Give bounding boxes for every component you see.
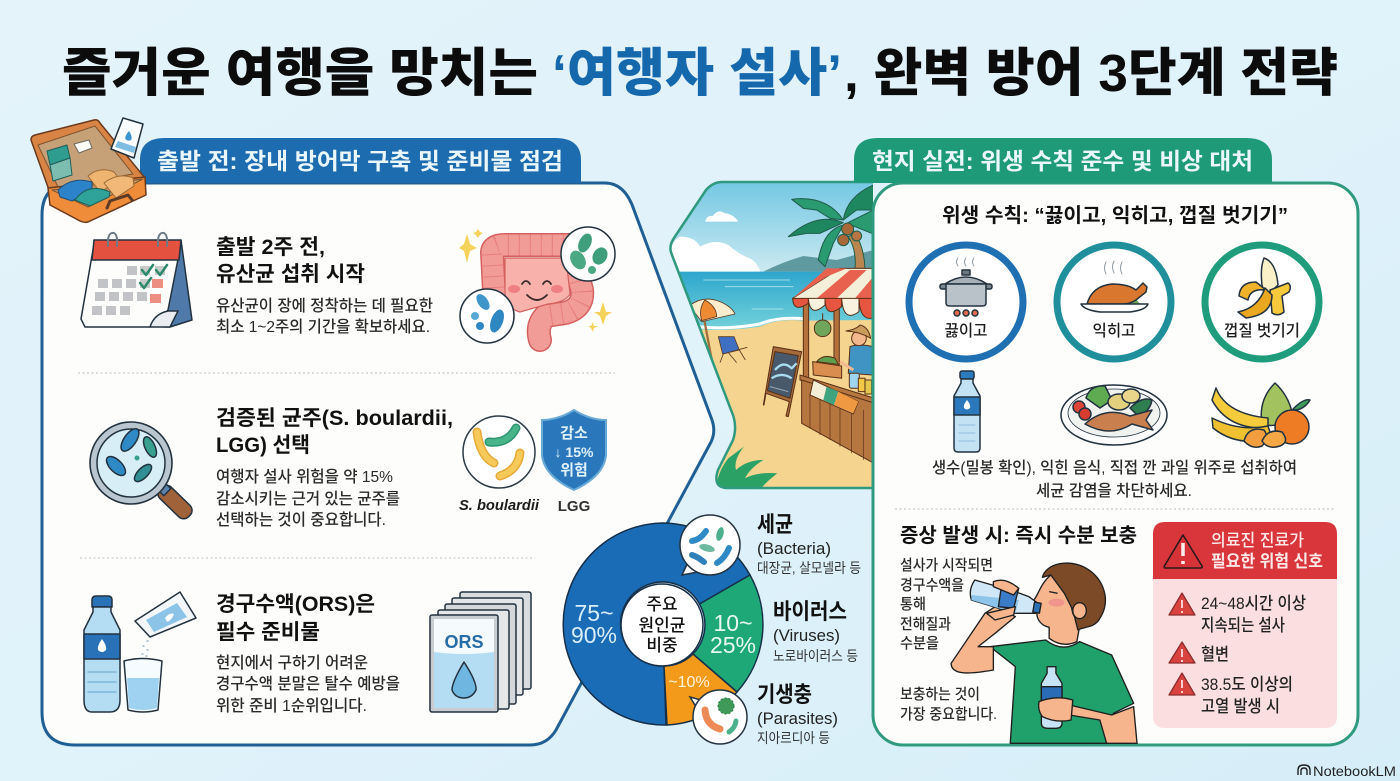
chart: main pathogen share donut (563, 512, 861, 746)
symptom body text: 수분을 (900, 635, 939, 652)
tab heading: on-site practice (854, 138, 1272, 183)
circle: boil: 끓이고 (944, 322, 988, 340)
warning: high fever: 고열 발생 시 (1201, 697, 1280, 716)
panel: on-site practice (854, 138, 1358, 745)
symptom body text: 보충하는 것이 (900, 686, 980, 703)
hygiene summary text (932, 459, 1297, 500)
value: bacteria: 75~ (574, 600, 614, 626)
title: ‘여행자 설사’ (552, 45, 842, 103)
donut centre label: 주요 (646, 595, 678, 614)
sandwich board (763, 347, 802, 417)
icon: smiling intestine with bubbles (459, 227, 615, 343)
segment: bacteria (563, 523, 750, 725)
icon: peeled banana (1238, 258, 1290, 318)
bubble: parasites (690, 690, 747, 744)
label: parasites: 기생충 (757, 682, 812, 707)
label: viruses: (Viruses) (773, 626, 840, 645)
icon: shield 15 percent (542, 410, 606, 490)
body text: 현지에서 구하기 어려운 (216, 654, 368, 672)
value: viruses: 25% (710, 632, 756, 658)
title: , 완벽 방어 3단계 전략 (844, 45, 1338, 103)
heading: 출발 2주 전, (216, 236, 325, 259)
symptom body text: 설사가 시작되면 (900, 557, 993, 574)
value: parasites: ~10% (668, 674, 710, 691)
bubble: blue bacteria (460, 289, 514, 343)
title (62, 45, 1338, 103)
heading (216, 236, 365, 286)
panel: before departure (31, 118, 714, 745)
circle: cook (1057, 245, 1171, 359)
label: parasites: 지아르디아 등 (757, 730, 830, 746)
symptom body text: 경구수액을 (900, 577, 964, 594)
value: viruses (710, 610, 756, 658)
warning: bloody stool (1169, 642, 1229, 664)
icon: plate of cooked food (1061, 385, 1167, 445)
clouds (669, 211, 760, 272)
tab heading: on-site practice: 현지 실전: 위생 수칙 준수 및 비상 대처 (872, 148, 1253, 174)
value: viruses: 10~ (713, 610, 753, 636)
row 3: oral rehydration salts (84, 592, 531, 715)
icon: fruit (1212, 383, 1310, 447)
icon: shield 15 percent: 감소 (560, 425, 588, 442)
symptom body text: 가장 중요합니다. (900, 706, 997, 723)
hygiene summary text: 세균 감염을 차단하세요. (1036, 482, 1192, 500)
label: bacteria: 대장균, 살모넬라 등 (757, 560, 861, 576)
panel: beach scene (660, 180, 880, 497)
heading: 유산균 섭취 시작 (216, 263, 365, 286)
body text (216, 297, 433, 336)
logo: NotebookLM: NotebookLM (1313, 764, 1396, 779)
tab heading: before departure (140, 138, 581, 183)
label: bacteria: (Bacteria) (757, 539, 831, 558)
panel: warning signs (1153, 522, 1337, 728)
icon: pot (940, 258, 992, 316)
body text: 위한 준비 1순위입니다. (216, 697, 367, 715)
warning header: 의료진 진료가 (1211, 531, 1304, 550)
heading: 필수 준비물 (216, 621, 320, 644)
label: S. boulardii: S. boulardii (459, 497, 540, 514)
row 2: proven strains (90, 407, 606, 529)
icon: S. boulardii culture (463, 416, 535, 488)
label: viruses: 노로바이러스 등 (773, 648, 858, 664)
symptom body text: 전해질과 (900, 616, 951, 633)
body text: 유산균이 장에 정착하는 데 필요한 (216, 297, 433, 315)
value: bacteria: 90% (571, 622, 617, 648)
segment: viruses (693, 575, 763, 692)
heading: 경구수액(ORS)은 (216, 593, 375, 616)
icon: ORS sachets: ORS (444, 632, 484, 652)
warning: high fever: 38.5도 이상의 (1201, 675, 1293, 694)
illustration: man drinking water (951, 563, 1137, 743)
heading: LGG) 선택 (216, 434, 310, 457)
bubble: green bacteria (561, 227, 615, 281)
label: viruses (773, 599, 858, 664)
label: parasites (757, 682, 838, 746)
warning: prolonged diarrhea (1169, 593, 1306, 635)
icon: ORS packet by suitcase (111, 118, 143, 158)
warning header (1153, 522, 1337, 728)
tab heading: before departure: 출발 전: 장내 방어막 구축 및 준비물 점검 (157, 148, 563, 174)
hygiene rule heading: 위생 수칙: “끓이고, 익히고, 껍질 벗기기” (942, 204, 1288, 227)
warning: prolonged diarrhea: 24~48시간 이상 (1201, 594, 1306, 613)
circle: cook: 익히고 (1092, 322, 1136, 340)
value: bacteria (571, 600, 617, 648)
market stall (792, 268, 872, 462)
body text (216, 654, 400, 715)
bubble: bacteria (680, 515, 740, 575)
warning: prolonged diarrhea: 지속되는 설사 (1201, 616, 1285, 635)
icon: shield 15 percent: ↓ 15% (555, 444, 594, 460)
warning header: 필요한 위험 신호 (1211, 552, 1323, 571)
symptom body text: 통해 (900, 596, 926, 613)
icon: calendar (81, 233, 192, 327)
donut centre label (621, 584, 703, 666)
body text: 최소 1~2주의 기간을 확보하세요. (216, 318, 430, 336)
hygiene summary text: 생수(밀봉 확인), 익힌 음식, 직접 깐 과일 위주로 섭취하여 (932, 459, 1297, 477)
grass (717, 447, 777, 490)
icon: magnifying glass (90, 422, 195, 522)
label: bacteria (757, 512, 861, 576)
label: bacteria: 세균 (757, 512, 793, 537)
circle: peel (1205, 245, 1319, 359)
segment: parasites (664, 654, 737, 725)
umbrella and chair (689, 299, 747, 363)
body text: 경구수액 분말은 탈수 예방을 (216, 675, 400, 693)
warning: high fever (1169, 673, 1293, 716)
body text (216, 468, 400, 529)
body text: 선택하는 것이 중요합니다. (216, 511, 386, 529)
body text: 여행자 설사 위험을 약 15% (216, 468, 393, 486)
label: LGG: LGG (558, 498, 590, 515)
icon: shield 15 percent: 위험 (560, 462, 588, 479)
circle: peel: 껍질 벗기기 (1224, 322, 1300, 340)
heading (216, 407, 453, 457)
symptom heading: 증상 발생 시: 즉시 수분 보충 (900, 524, 1137, 547)
heading (216, 593, 375, 644)
heading: 검증된 균주(S. boulardii, (216, 407, 453, 430)
donut centre label: 비중 (646, 636, 678, 655)
title: 즐거운 여행을 망치는 (62, 45, 538, 103)
icon: sealed water bottle (954, 371, 980, 452)
donut centre label: 원인균 (639, 616, 685, 635)
label: parasites: (Parasites) (757, 709, 838, 728)
row 1: probiotics timing (81, 227, 615, 343)
circle: boil (909, 245, 1023, 359)
body text: 감소시키는 근거 있는 균주를 (216, 490, 400, 508)
icon: suitcase (31, 120, 146, 222)
symptom body text (900, 557, 997, 723)
icon: roast chicken (1081, 261, 1148, 312)
icon: water bottle, glass and packet (84, 592, 196, 712)
palm tree (788, 185, 880, 268)
panel body: before departure (42, 183, 714, 745)
warning: bloody stool: 혈변 (1201, 645, 1229, 664)
panel body: on-site practice (873, 183, 1358, 745)
icon: ORS sachets (430, 592, 531, 712)
label: viruses: 바이러스 (773, 599, 847, 624)
